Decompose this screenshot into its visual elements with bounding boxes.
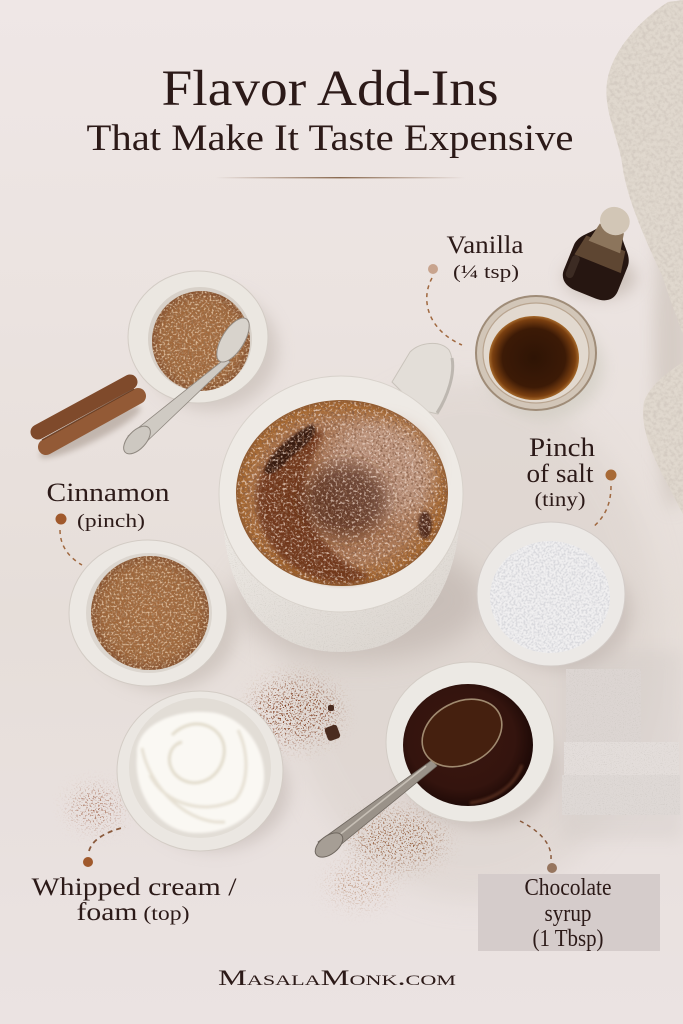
label: chocolate syrup: syrup: [544, 901, 592, 927]
label: whipped cream: [32, 827, 237, 926]
mug shadow: [235, 540, 485, 660]
label: pinch of salt: (tiny): [534, 489, 586, 511]
coffee mug: [219, 343, 485, 660]
label: pinch of salt: Pinch: [529, 433, 595, 462]
label: chocolate syrup: (1 Tbsp): [532, 926, 604, 952]
label: vanilla: [427, 232, 524, 345]
whipped cream bowl: [117, 691, 289, 851]
whipped cream: [137, 712, 264, 833]
chocolate syrup: [403, 684, 533, 806]
label: chocolate syrup: [478, 821, 660, 952]
title divider: [215, 177, 465, 178]
label: pinch of salt: of salt: [526, 459, 594, 488]
mug handle: [392, 343, 452, 414]
cinnamon sticks: [35, 382, 145, 466]
label: whipped cream: Whipped cream /: [32, 874, 237, 901]
label: cinnamon: [46, 478, 170, 565]
subtitle: That Make It Taste Expensive: [86, 118, 574, 159]
spoon in chocolate syrup: [311, 686, 514, 862]
label: cinnamon: (pinch): [77, 511, 145, 532]
label: vanilla: Vanilla: [446, 232, 524, 259]
mug body: [224, 530, 459, 652]
chocolate chunks: [324, 705, 341, 742]
vanilla bottle: [558, 197, 647, 305]
footer brand: MasalaMonk.com: [218, 965, 456, 990]
coffee surface: [236, 400, 448, 586]
label: cinnamon: Cinnamon: [46, 478, 170, 507]
linen towel: [606, 0, 683, 514]
salt bowl: [477, 522, 632, 670]
top spice bowl: [128, 271, 278, 410]
chocolate syrup bowl: [386, 662, 558, 828]
mug rim: [219, 376, 463, 612]
texture patches right: [562, 669, 680, 815]
label: whipped cream: foam (top): [76, 899, 189, 926]
title: Flavor Add-Ins: [162, 61, 498, 117]
cinnamon bowl: [69, 540, 236, 690]
powder scatter: [73, 682, 442, 903]
spoon in top spice bowl: [119, 313, 256, 459]
label: chocolate syrup: Chocolate: [524, 875, 612, 901]
label: pinch of salt: [526, 433, 616, 528]
vanilla bowl: [476, 296, 603, 418]
label: vanilla: (¼ tsp): [453, 262, 519, 283]
